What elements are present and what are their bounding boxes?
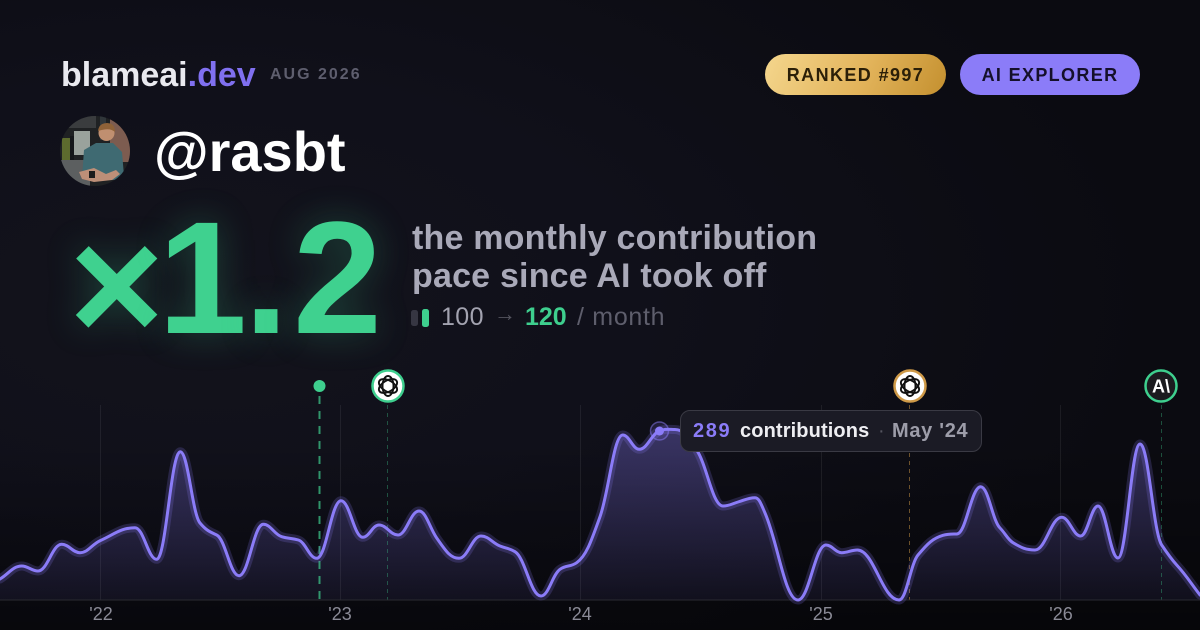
avatar <box>60 116 130 186</box>
pace unit: / month <box>577 303 665 331</box>
icon: Anthropic marker <box>1146 370 1176 402</box>
badge: AI explorer <box>960 54 1140 95</box>
badge: rank <box>765 54 946 95</box>
baseline axis <box>0 599 1200 601</box>
badge: rank: RANKED #997 <box>787 65 924 85</box>
headline multiplier: . <box>244 188 288 367</box>
logo wordmark: blameai.dev <box>61 56 256 94</box>
year axis labels: '26 <box>1049 604 1073 624</box>
AI launch dashed marker lines <box>320 396 1162 600</box>
area under curve <box>0 429 1200 600</box>
pace arrow: → <box>494 301 516 326</box>
icon: OpenAI marker two <box>894 370 926 402</box>
headline multiplier: 2 <box>293 188 382 367</box>
year axis labels: '25 <box>809 604 833 624</box>
year axis labels: '22 <box>89 604 113 624</box>
year grid lines <box>100 405 1060 600</box>
description line two: pace since AI took off <box>412 257 767 295</box>
pace stat before: 100 <box>441 303 484 331</box>
icon: Anthropic marker: A\ <box>1152 376 1170 396</box>
year axis labels: '24 <box>568 604 592 624</box>
headline multiplier: × <box>69 193 164 376</box>
tooltip label: contributions <box>740 420 869 442</box>
tooltip separator: · <box>878 420 885 442</box>
icon: OpenAI marker one <box>372 370 404 402</box>
headline multiplier <box>69 188 386 376</box>
peak highlight dot <box>650 422 668 440</box>
tooltip date: May '24 <box>892 420 968 442</box>
year axis labels: '23 <box>328 604 352 624</box>
badge: AI explorer: AI EXPLORER <box>982 65 1118 85</box>
username: @rasbt <box>154 120 346 183</box>
headline multiplier: 1 <box>158 188 247 367</box>
tooltip value: 289 <box>693 420 731 442</box>
year axis labels <box>89 604 1073 624</box>
tooltip <box>680 410 982 452</box>
pace stat after: 120 <box>525 303 567 331</box>
marker: AI start dot <box>314 380 326 392</box>
contribution curve <box>0 429 1200 600</box>
pace icon bars <box>411 309 429 327</box>
date label: AUG 2026 <box>270 66 362 83</box>
description line one: the monthly contribution <box>412 219 817 257</box>
